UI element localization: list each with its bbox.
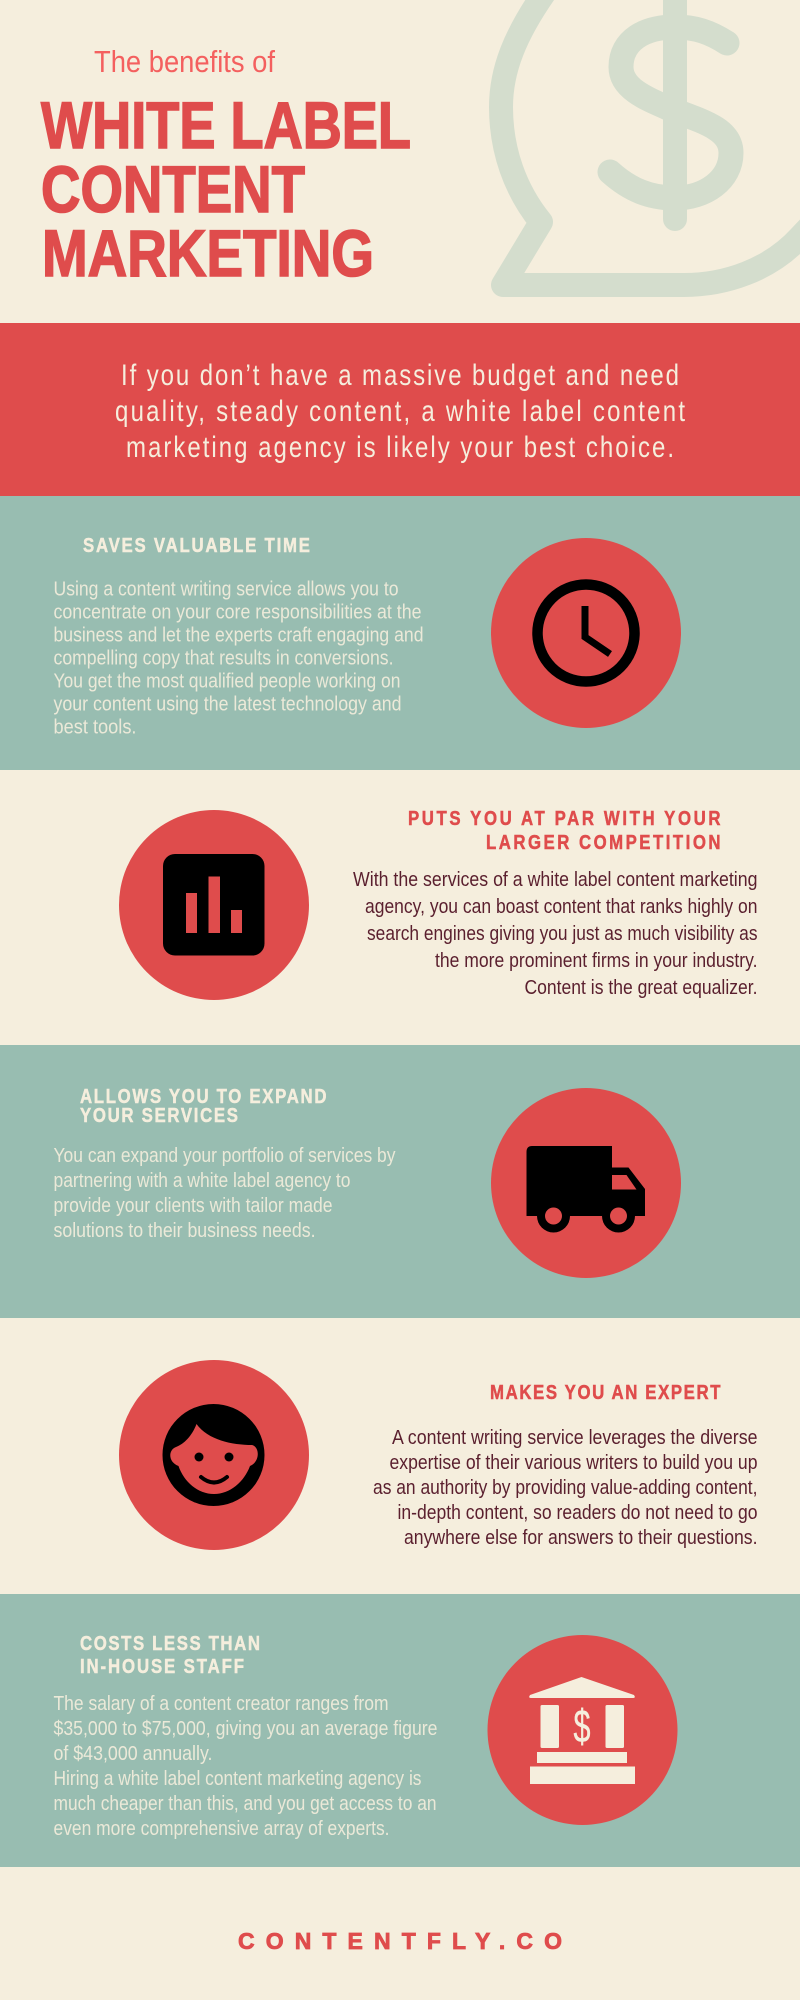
body text: Hiring a white label content marketing agency is (54, 1768, 422, 1790)
icon: dollar speech bubble (501, 0, 800, 285)
body text: anywhere else for answers to their questions. (404, 1527, 758, 1549)
heading: PUTS YOU AT PAR WITH YOUR (408, 806, 721, 829)
panel: header (0, 0, 800, 323)
body text (353, 869, 758, 999)
icon: truck (491, 1088, 681, 1278)
icon: face (119, 1360, 309, 1550)
heading: COSTS LESS THAN (80, 1631, 260, 1654)
intro text: marketing agency is likely your best choice. (126, 429, 674, 464)
icon: bar chart (119, 810, 309, 1000)
body text (373, 1427, 758, 1549)
intro text (115, 357, 685, 464)
title (41, 88, 411, 290)
body text: partnering with a white label agency to (54, 1170, 350, 1192)
body text (54, 1693, 438, 1840)
heading: ALLOWS YOU TO EXPAND (80, 1084, 326, 1107)
heading (80, 1631, 260, 1677)
heading (408, 806, 721, 853)
body text: even more comprehensive array of experts. (54, 1818, 390, 1840)
body text: much cheaper than this, and you get access to an (54, 1793, 436, 1815)
subtitle: The benefits of (94, 44, 275, 79)
body text: Content is the great equalizer. (524, 977, 758, 999)
body text: compelling copy that results in conversions. (54, 648, 394, 670)
body text: solutions to their business needs. (54, 1220, 316, 1242)
body text: A content writing service leverages the diverse (392, 1427, 758, 1449)
footer brand: CONTENTFLY.CO (238, 1928, 562, 1954)
icon: clock (491, 538, 681, 728)
body text (54, 1145, 396, 1242)
body text: your content using the latest technology and (54, 694, 402, 716)
heading: IN-HOUSE STAFF (80, 1654, 244, 1677)
body text: the more prominent firms in your industry. (435, 950, 758, 972)
title: CONTENT (41, 152, 305, 226)
panel: makes you an expert (0, 1318, 800, 1594)
body text: The salary of a content creator ranges from (54, 1693, 388, 1715)
intro text: quality, steady content, a white label content (115, 393, 685, 428)
title: WHITE LABEL (41, 88, 411, 162)
icon: bank: $ (574, 1700, 590, 1752)
heading: SAVES VALUABLE TIME (83, 533, 310, 556)
heading: LARGER COMPETITION (486, 830, 721, 853)
body text: best tools. (54, 716, 136, 738)
body text: concentrate on your core responsibilities at the (54, 602, 422, 624)
body text: business and let the experts craft engaging and (54, 624, 424, 646)
heading (80, 1084, 326, 1126)
body text: You get the most qualified people working on (54, 670, 400, 692)
body text: With the services of a white label content marketing (353, 869, 758, 891)
icon: bank (488, 1635, 678, 1825)
heading: YOUR SERVICES (80, 1103, 238, 1126)
body text (54, 578, 424, 738)
heading: MAKES YOU AN EXPERT (490, 1380, 721, 1403)
body text: of $43,000 annually. (54, 1743, 212, 1765)
body text: provide your clients with tailor made (54, 1195, 332, 1217)
panel: puts you at par (0, 770, 800, 1045)
panel: intro band (0, 323, 800, 496)
panel: footer (0, 1867, 800, 2000)
body text: Using a content writing service allows you to (54, 578, 398, 600)
panel: costs less than in-house staff (0, 1594, 800, 1867)
panel: expand your services (0, 1045, 800, 1318)
panel: saves valuable time (0, 496, 800, 770)
title: MARKETING (42, 216, 374, 290)
body text: in-depth content, so readers do not need to go (398, 1502, 758, 1524)
body text: $35,000 to $75,000, giving you an average figure (54, 1718, 438, 1740)
intro text: If you don’t have a massive budget and need (121, 357, 679, 392)
body text: You can expand your portfolio of services by (54, 1145, 396, 1167)
body text: expertise of their various writers to build you up (390, 1452, 758, 1474)
